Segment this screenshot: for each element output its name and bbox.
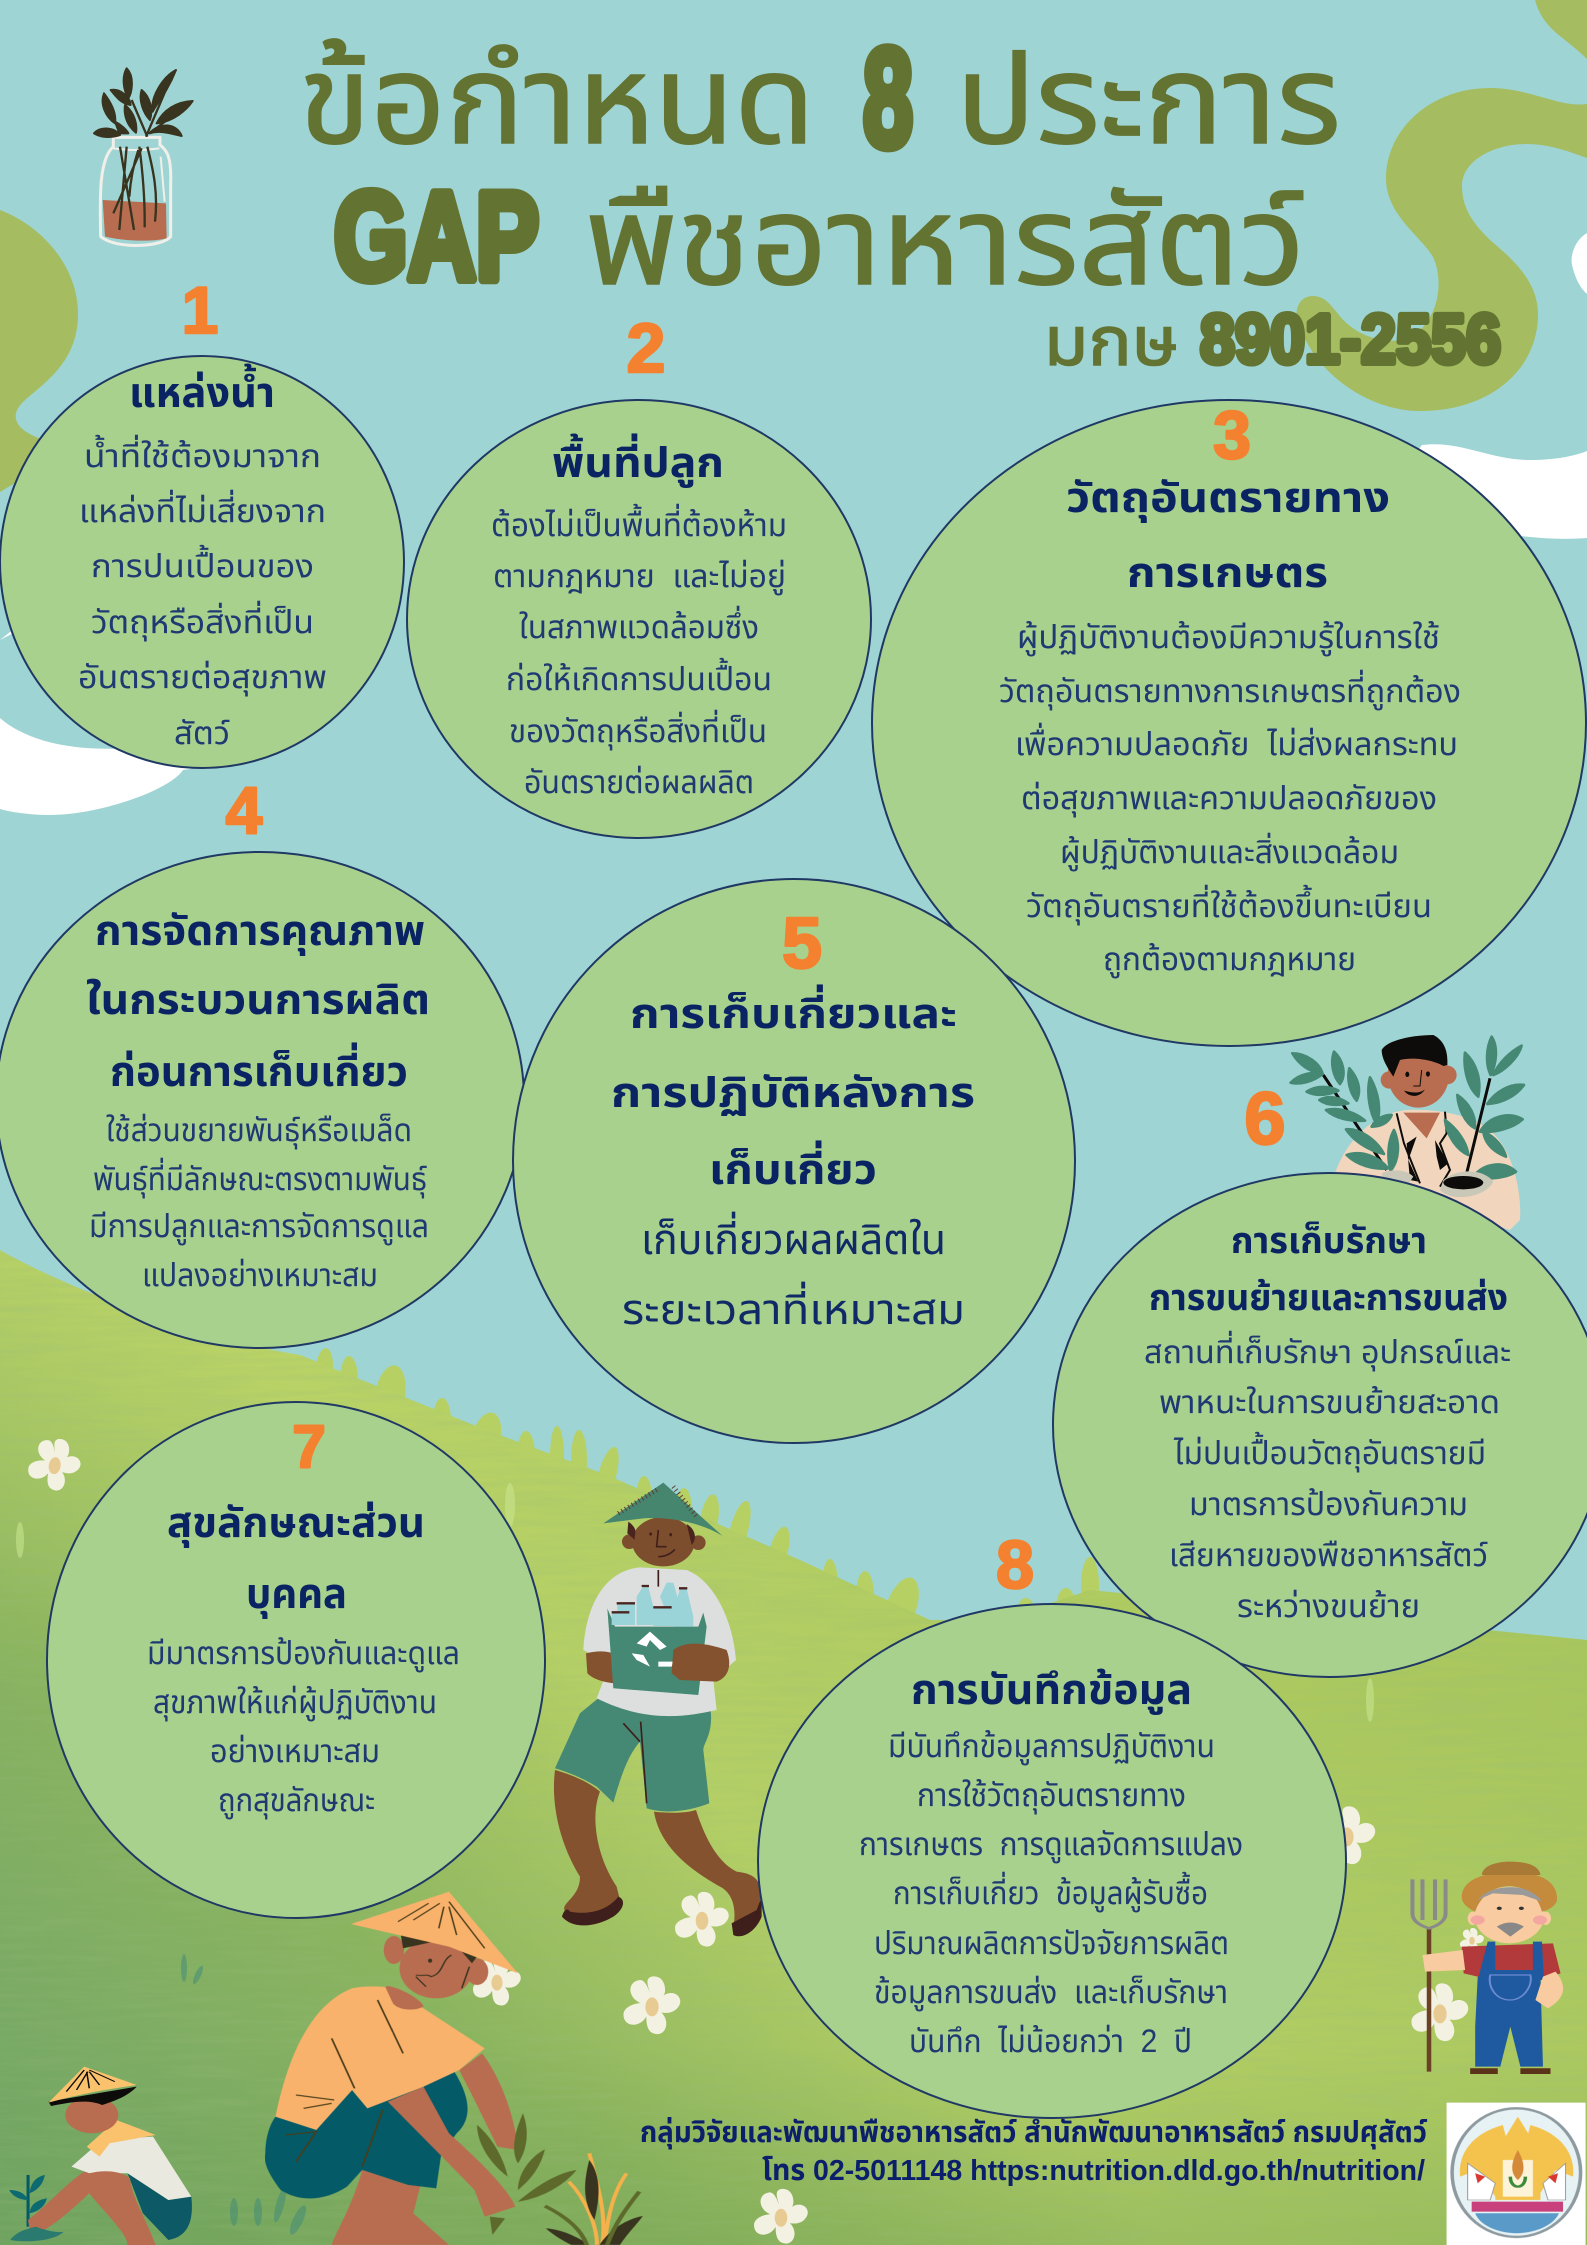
panel 2: planting area (407, 400, 871, 838)
panel 8: record keeping: ปริมาณผลิตการปัจจัยการผลิต (874, 1925, 1229, 1961)
numbers (182, 273, 1286, 1603)
panel 3: agricultural hazardous materials: ถูกต้องตามกฎหมาย (1103, 941, 1356, 979)
panel 4: quality management: การจัดการคุณภาพ (95, 907, 425, 956)
logo (1447, 2103, 1585, 2245)
panel 8: record keeping: มีบันทึกข้อมูลการปฏิบัติงาน (888, 1728, 1215, 1766)
panel 3: agricultural hazardous materials: การเกษตร (1127, 549, 1328, 596)
figure: farmer carrying recycling basket (554, 1483, 762, 1936)
olive blob right (1297, 88, 1587, 411)
title: ประการ (956, 32, 1341, 170)
panel 7: personal hygiene: 7 (292, 1413, 326, 1480)
footer credit (640, 2117, 1428, 2187)
panel 1: water source: สัตว์ (174, 715, 230, 751)
panel 7: personal hygiene: สุขภาพให้แก่ผู้ปฏิบัติงาน (153, 1684, 437, 1722)
numbers: 8 (996, 1527, 1034, 1603)
panel 2: planting area: ต้องไม่เป็นพื้นที่ต้องห้าม (491, 503, 787, 543)
decorative white cloud left (0, 233, 1587, 815)
panel 3: agricultural hazardous materials: เพื่อความปลอดภัย ไม่ส่งผลกระทบ (1015, 722, 1458, 762)
panel 2: planting area: ของวัตถุหรือสิ่งที่เป็น (509, 709, 767, 750)
title: พืชอาหารสัตว์ (585, 173, 1305, 311)
panel 1: water source: น้ำที่ใช้ต้องมาจาก (84, 434, 321, 474)
panel 1: water source: อันตรายต่อสุขภาพ (78, 659, 327, 696)
footer credit: กลุ่มวิจัยและพัฒนาพืชอาหารสัตว์ สำนักพัฒนาอาหารสัตว์ กรมปศุสัตว์ (640, 2117, 1428, 2149)
footer credit: โทร 02-5011148 https:nutrition.dld.go.th/nutrition/ (762, 2155, 1425, 2187)
panel 7: personal hygiene: ถูกสุขลักษณะ (218, 1782, 375, 1820)
panel 5: harvest and post-harvest: ระยะเวลาที่เหมาะสม (622, 1281, 965, 1333)
panel 6: storage and transport (1053, 1173, 1587, 1677)
panel 6: storage and transport: มาตรการป้องกันความ (1189, 1486, 1468, 1522)
olive blob left (0, 210, 78, 492)
numbers: 6 (1244, 1077, 1286, 1160)
panel 3: agricultural hazardous materials: ผู้ปฏิบัติงานและสิ่งแวดล้อม (1060, 832, 1399, 872)
panel 5: harvest and post-harvest: 5 (782, 904, 822, 984)
figure: old farmer with pitchfork (1412, 1862, 1563, 2074)
panel 6: storage and transport: สถานที่เก็บรักษา อุปกรณ์และ (1144, 1330, 1511, 1371)
panel 7: personal hygiene: มีมาตรการป้องกันและดูแล (147, 1635, 460, 1673)
panel 3: agricultural hazardous materials: 3 (1213, 397, 1251, 473)
panel 6: storage and transport: ไม่ปนเปื้อนวัตถุอันตรายมี (1173, 1431, 1486, 1472)
numbers: 1 (182, 273, 218, 347)
grassy hill (0, 1250, 1587, 2245)
panel 7: personal hygiene (47, 1402, 545, 1918)
panel 1: water source: วัตถุหรือสิ่งที่เป็น (91, 600, 314, 641)
panel 6: storage and transport: ระหว่างขนย้าย (1237, 1588, 1420, 1624)
panel 5: harvest and post-harvest: การเก็บเกี่ยวและ (630, 984, 957, 1037)
panel 4: quality management: ก่อนการเก็บเกี่ยว (110, 1042, 408, 1095)
numbers: 2 (627, 309, 665, 387)
panel 6: storage and transport: พาหนะในการขนย้ายสะอาด (1159, 1384, 1500, 1420)
figure: farmer planting seedling (265, 1892, 643, 2245)
panel 4: quality management: มีการปลูกและการจัดการดูแล (89, 1208, 429, 1246)
panel 1: water source (0, 356, 404, 768)
panel 4: quality management: แปลงอย่างเหมาะสม (142, 1257, 378, 1293)
panel 7: personal hygiene: อย่างเหมาะสม (210, 1733, 380, 1769)
panel 1: water source: แหล่งน้ำ (129, 363, 275, 416)
icon: plant in glass jar (94, 68, 193, 245)
subtitle standard number: 8901-2556 (1200, 300, 1501, 378)
title: 8 (863, 19, 913, 176)
panel 3: agricultural hazardous materials (872, 397, 1586, 1046)
panel 3: agricultural hazardous materials: ผู้ปฏิบัติงานต้องมีความรู้ในการใช้ (1017, 619, 1440, 657)
title: GAP (334, 168, 539, 306)
panel 5: harvest and post-harvest: เก็บเกี่ยว (709, 1140, 877, 1193)
panel 3: agricultural hazardous materials: ต่อสุขภาพและความปลอดภัยของ (1021, 780, 1437, 817)
panel 3: agricultural hazardous materials: วัตถุอันตรายที่ใช้ต้องขึ้นทะเบียน (1026, 884, 1432, 925)
panel 8: record keeping: การเก็บเกี่ยว ข้อมูลผู้รับซื้อ (893, 1871, 1208, 1913)
panel 6: storage and transport: การเก็บรักษา (1231, 1220, 1427, 1261)
panel 1: water source: การปนเปื้อนของ (91, 544, 314, 584)
olive blob top right (1535, 0, 1587, 59)
panel 4: quality management: ใช้ส่วนขยายพันธุ์หรือเมล็ด (106, 1112, 412, 1149)
panel 4: quality management (0, 852, 524, 1348)
teal patch over left cloud (0, 622, 130, 749)
panel 7: personal hygiene: สุขลักษณะส่วน (167, 1499, 425, 1548)
panel 5: harvest and post-harvest: การปฏิบัติหลังการ (611, 1069, 975, 1116)
panel 8: record keeping: การใช้วัตถุอันตรายทาง (917, 1777, 1186, 1814)
title (299, 19, 1341, 311)
figure: man holding plants (1291, 1035, 1524, 1230)
panel 5: harvest and post-harvest: เก็บเกี่ยวผลผลิตใน (641, 1211, 946, 1263)
flowers (25, 1434, 1484, 2244)
panel 6: storage and transport: เสียหายของพืชอาหารสัตว์ (1169, 1537, 1488, 1573)
panel 3: agricultural hazardous materials: วัตถุอันตรายทางการเกษตรที่ถูกต้อง (999, 669, 1461, 711)
panel 8: record keeping: ข้อมูลการขนส่ง และเก็บรักษา (874, 1974, 1228, 2012)
subtitle standard number (1044, 300, 1501, 380)
title: ข้อกำหนด (299, 32, 815, 170)
panel 6: storage and transport: การขนย้ายและการขนส่ง (1149, 1277, 1508, 1318)
panel 8: record keeping: การเกษตร การดูแลจัดการแปลง (859, 1826, 1243, 1864)
panel 2: planting area: ในสภาพแวดล้อมซึ่ง (519, 605, 759, 645)
panel 2: planting area: ก่อให้เกิดการปนเปื้อน (506, 657, 772, 697)
subtitle standard number: มกษ (1044, 304, 1178, 380)
panel 7: personal hygiene: บุคคล (246, 1570, 347, 1619)
numbers: 4 (226, 773, 263, 847)
panel 1: water source: แหล่งที่ไม่เสี่ยงจาก (79, 489, 326, 529)
panel 8: record keeping (758, 1604, 1346, 2118)
panel 2: planting area: พื้นที่ปลูก (552, 433, 724, 488)
panel 5: harvest and post-harvest (513, 879, 1075, 1443)
panel 4: quality management: ในกระบวนการผลิต (86, 976, 430, 1023)
figure: small farmer with seedling (9, 2067, 192, 2245)
panel 4: quality management: พันธุ์ที่มีลักษณะตรงตามพันธุ์ (93, 1157, 427, 1198)
panel 8: record keeping: การบันทึกข้อมูล (911, 1666, 1192, 1715)
panel 3: agricultural hazardous materials: วัตถุอันตรายทาง (1066, 474, 1390, 523)
panel 2: planting area: ตามกฎหมาย และไม่อยู่ (493, 558, 786, 596)
panel 8: record keeping: บันทึก ไม่น้อยกว่า 2 ปี (909, 2023, 1192, 2059)
panel 2: planting area: อันตรายต่อผลผลิต (524, 764, 754, 800)
